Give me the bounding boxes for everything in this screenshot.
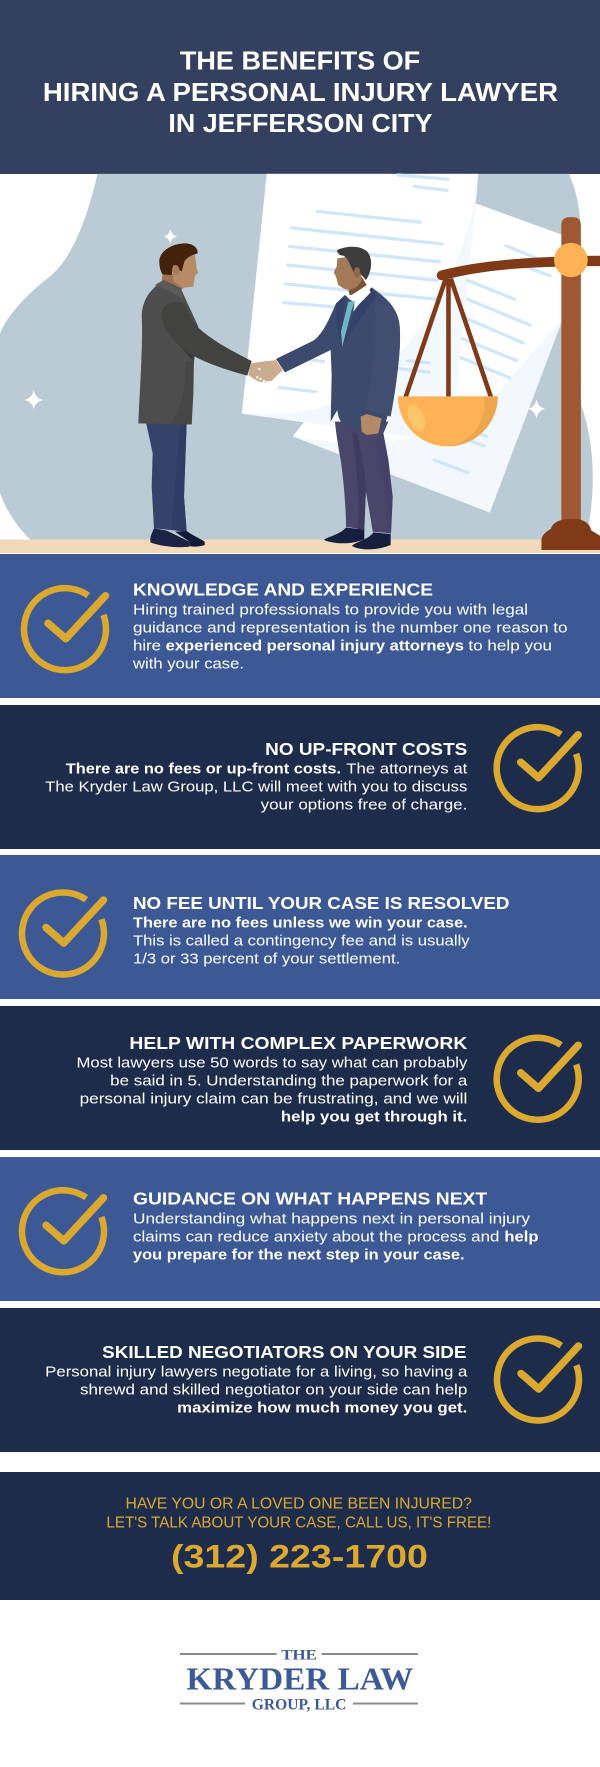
logo: GROUP, LLC: [252, 1696, 346, 1713]
text block: [76, 1054, 468, 1125]
phone number: (312) 223-1700: [171, 1538, 428, 1574]
panel: knowledge and experience: [0, 554, 600, 698]
text block: help: [504, 1228, 538, 1245]
handshake: [248, 360, 283, 382]
scale of justice: [398, 217, 600, 550]
icon: check circle: [24, 588, 106, 670]
text block: Understanding what happens next in personal injury: [133, 1210, 531, 1227]
text block: There are no fees or up-front costs.: [66, 760, 341, 777]
left man in grey jacket: [138, 243, 252, 547]
title: [43, 46, 558, 138]
call to action text: HAVE YOU OR A LOVED ONE BEEN INJURED?: [126, 1495, 472, 1512]
text block: [132, 601, 568, 672]
text block: claims can reduce anxiety about the process and: [133, 1228, 499, 1245]
text block: [45, 1364, 468, 1417]
heading: NO FEE UNTIL YOUR CASE IS RESOLVED: [133, 893, 509, 913]
title: IN JEFFERSON CITY: [168, 108, 432, 138]
text block: Hiring trained professionals to provide you with legal: [133, 601, 528, 618]
text block: Most lawyers use 50 words to say what can probably: [76, 1054, 468, 1071]
text block: The Kryder Law Group, LLC will meet with you to discuss: [45, 778, 467, 795]
panel: no up-front costs: [0, 705, 600, 849]
text block: Personal injury lawyers negotiate for a living, so having a: [45, 1364, 468, 1381]
logo: THE: [281, 1648, 317, 1664]
icon: check circle: [497, 1038, 579, 1120]
logo: [180, 1648, 418, 1713]
sparkles: [24, 229, 545, 419]
ground: [0, 540, 600, 553]
text block: [133, 914, 470, 967]
text block: The attorneys at: [346, 760, 468, 777]
panel: skilled negotiators: [0, 1308, 600, 1452]
text block: you prepare for the next step in your case.: [133, 1246, 465, 1263]
text block: personal injury claim can be frustrating, and we will: [80, 1090, 467, 1107]
text block: be said in 5. Understanding the paperwork for a: [110, 1072, 468, 1089]
text block: to help you: [468, 637, 552, 654]
panel: complex paperwork: [0, 1006, 600, 1150]
background blob: [0, 174, 593, 540]
text block: This is called a contingency fee and is usually: [133, 932, 470, 949]
text block: experienced personal injury attorneys: [166, 637, 464, 654]
call to action text: LET'S TALK ABOUT YOUR CASE, CALL US, IT'S FREE!: [106, 1514, 491, 1531]
title: HIRING A PERSONAL INJURY LAWYER: [43, 77, 558, 107]
text block: [45, 760, 468, 813]
panel: call to action: [0, 1472, 600, 1600]
heading: KNOWLEDGE AND EXPERIENCE: [133, 580, 433, 600]
text block: with your case.: [132, 655, 244, 672]
heading: GUIDANCE ON WHAT HAPPENS NEXT: [133, 1189, 488, 1209]
text block: guidance and representation is the number one reason to: [133, 619, 568, 636]
call to action text: [106, 1495, 491, 1531]
icon: check circle: [22, 1190, 104, 1272]
text block: hire: [133, 637, 161, 654]
text block: shrewd and skilled negotiator on your side can help: [80, 1382, 467, 1399]
illustration: handshake with documents and scale: [0, 174, 600, 553]
text block: There are no fees unless we win your case.: [133, 914, 468, 931]
right man in navy suit: [276, 247, 400, 549]
documents: [242, 174, 562, 512]
logo: KRYDER LAW: [186, 1660, 413, 1696]
heading: SKILLED NEGOTIATORS ON YOUR SIDE: [102, 1342, 466, 1362]
text block: help you get through it.: [281, 1108, 467, 1125]
text block: [133, 1210, 538, 1263]
heading: NO UP-FRONT COSTS: [265, 739, 467, 759]
icon: check circle: [22, 892, 104, 974]
panel: no fee until resolved: [0, 855, 600, 999]
text block: 1/3 or 33 percent of your settlement.: [133, 950, 400, 967]
text block: your options free of charge.: [261, 796, 467, 813]
heading: HELP WITH COMPLEX PAPERWORK: [129, 1033, 468, 1053]
icon: check circle: [497, 1338, 579, 1420]
text block: maximize how much money you get.: [177, 1400, 467, 1417]
title: THE BENEFITS OF: [180, 46, 420, 76]
panel: guidance on what happens next: [0, 1157, 600, 1301]
icon: check circle: [497, 727, 579, 809]
header panel: [0, 0, 600, 174]
